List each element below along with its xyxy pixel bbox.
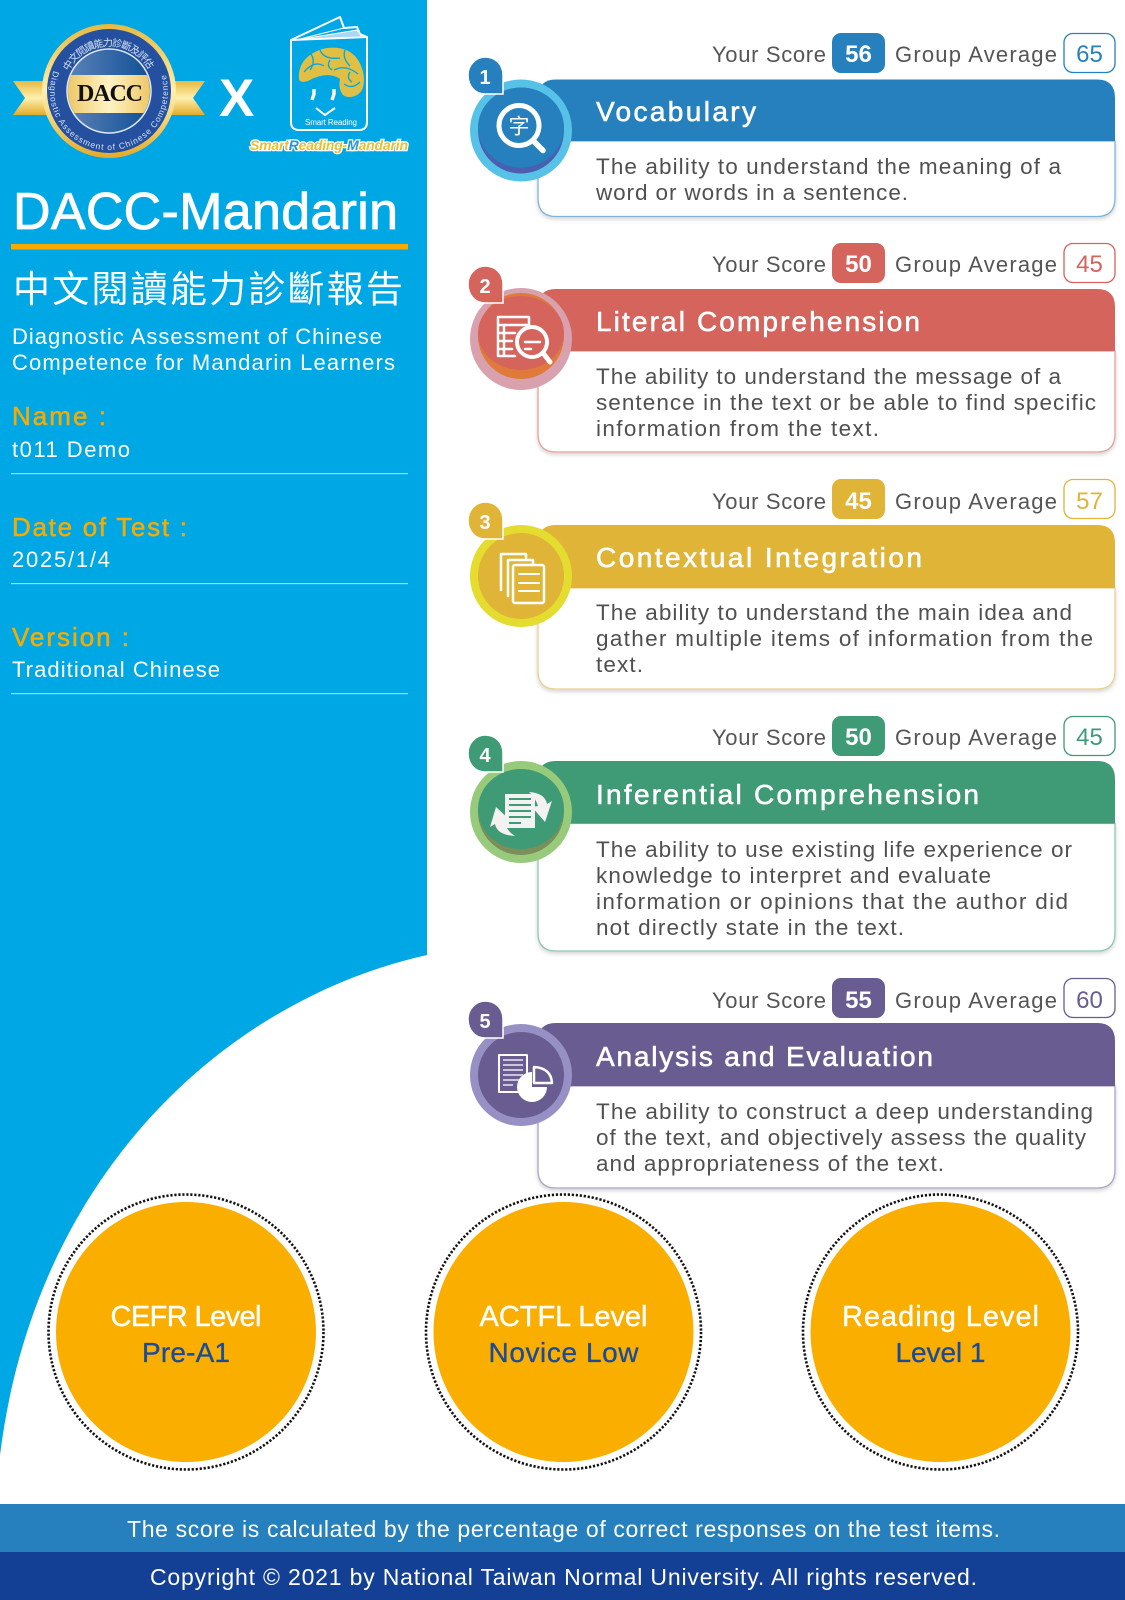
field: version: Traditional Chinese [12, 657, 220, 682]
description: not directly state in the text. [596, 915, 904, 940]
X symbol: X [219, 69, 254, 128]
description: and appropriateness of the text. [596, 1151, 944, 1176]
scores: Group Average [895, 252, 1057, 277]
description: knowledge to interpret and evaluate [596, 863, 991, 888]
heading: Vocabulary [596, 96, 756, 127]
scores: 50 [845, 724, 872, 751]
panel: vocabulary [468, 33, 1115, 216]
icon: document with pie chart [470, 1024, 572, 1126]
field: version [11, 622, 408, 694]
field: date of test [11, 512, 408, 584]
seal ring text: 中文閱讀能力診斷及評估 [63, 38, 154, 70]
title: DACC-Mandarin [13, 183, 398, 241]
description [596, 600, 1093, 677]
level circle: reading: Reading Level [842, 1301, 1039, 1333]
scores: 60 [1076, 987, 1103, 1014]
description: word or words in a sentence. [595, 180, 908, 205]
card body [538, 588, 1115, 689]
title underline [11, 244, 408, 250]
badge: 3: 3 [479, 512, 491, 534]
badge: 1 [468, 57, 503, 94]
field: version: Version : [12, 622, 129, 652]
description: The ability to construct a deep understanding [596, 1099, 1093, 1124]
scores [712, 33, 1115, 73]
subtitle: Competence for Mandarin Learners [12, 350, 395, 375]
heading: Analysis and Evaluation [596, 1041, 933, 1072]
card header [538, 761, 1115, 824]
icon: document with arrows [470, 761, 572, 863]
scores: Group Average [895, 988, 1057, 1013]
description: The ability to understand the meaning of a [596, 154, 1061, 179]
badge: 2: 2 [479, 276, 491, 298]
scores: 65 [1076, 41, 1103, 68]
badge: 2 [468, 266, 503, 303]
level circle: ACTFL [426, 1194, 701, 1470]
scores: Group Average [895, 42, 1057, 67]
icon: smile face [312, 89, 334, 100]
card body [538, 1086, 1115, 1188]
icon: document with magnifier [470, 288, 572, 390]
seal ring text [48, 38, 168, 150]
card header [538, 1023, 1115, 1086]
badge: 4 [468, 735, 503, 772]
icon: magnifier with character: 字 [508, 116, 530, 138]
scores: Your Score [712, 42, 826, 67]
Chinese title: 中文閱讀能力診斷報告 [13, 259, 403, 313]
field: name: Name : [12, 401, 106, 431]
card body [538, 824, 1115, 951]
scores: 55 [845, 987, 872, 1014]
level circle: CEFR: CEFR Level [110, 1301, 262, 1333]
level circle: reading: Level 1 [896, 1337, 986, 1368]
logo wordmark: SmartReading-Mandarin [250, 137, 408, 153]
icon: book pages [291, 17, 367, 40]
panel: blue sidebar with curve [0, 0, 427, 1455]
description: The ability to understand the message of a [596, 364, 1061, 389]
icon: magnifier with character [470, 80, 572, 182]
scores: 45 [845, 488, 872, 515]
icon: gold ribbon [13, 81, 205, 115]
heading: Literal Comprehension [596, 306, 920, 337]
description: information from the text. [596, 416, 879, 441]
panel: literal comprehension [468, 243, 1115, 452]
icon: stacked documents [470, 525, 572, 627]
heading: Inferential Comprehension [596, 779, 979, 810]
scores: Group Average [895, 489, 1057, 514]
logo caption: Smart Reading [305, 118, 357, 127]
scores: 50 [845, 251, 872, 278]
scores [712, 243, 1115, 283]
field: name: t011 Demo [12, 437, 130, 462]
level circle: CEFR: Pre-A1 [142, 1337, 230, 1368]
scores: Your Score [712, 725, 826, 750]
scores: 57 [1076, 488, 1103, 515]
footer: score note: The score is calculated by the percentage of correct responses on the test items. [127, 1516, 1000, 1542]
scores: 56 [845, 41, 872, 68]
description: sentence in the text or be able to find specific [596, 390, 1096, 415]
scores: Your Score [712, 988, 826, 1013]
panel: inferential comprehension [468, 716, 1115, 951]
scores: Your Score [712, 252, 826, 277]
scores [712, 716, 1115, 756]
description: gather multiple items of information from the [596, 626, 1093, 651]
level circle: ACTFL: Novice Low [488, 1337, 639, 1368]
field: name [11, 401, 408, 474]
scores: Your Score [712, 489, 826, 514]
panel: analysis and evaluation [468, 978, 1115, 1188]
card header [538, 289, 1115, 351]
description [596, 1099, 1093, 1176]
card header [538, 80, 1115, 141]
description [595, 154, 1061, 205]
card body [538, 351, 1115, 452]
scores [712, 978, 1115, 1018]
badge: 5 [468, 1001, 503, 1038]
description: The ability to understand the main idea and [596, 600, 1072, 625]
level circle: ACTFL: ACTFL Level [480, 1301, 648, 1333]
subtitle [12, 324, 395, 375]
panel: contextual integration [468, 479, 1115, 689]
footer: score note [0, 1504, 1125, 1552]
card body [538, 141, 1115, 216]
field: date of test: Date of Test : [12, 512, 187, 542]
logo: DACC seal [13, 24, 205, 158]
badge: 3 [468, 502, 503, 539]
level circle: CEFR [48, 1194, 324, 1470]
description: The ability to use existing life experience or [596, 837, 1072, 862]
description: of the text, and objectively assess the quality [596, 1125, 1087, 1150]
scores: Group Average [895, 725, 1057, 750]
seal title: DACC [77, 81, 143, 107]
card header [538, 525, 1115, 588]
description [596, 837, 1072, 940]
seal ring text: Diagnostic Assessment of Chinese Competence [48, 71, 168, 150]
badge: 4: 4 [479, 745, 491, 767]
footer: copyright [0, 1552, 1125, 1600]
description [596, 364, 1096, 441]
scores [712, 479, 1115, 519]
footer: copyright: Copyright © 2021 by National Taiwan Normal University. All rights reserved. [150, 1564, 977, 1590]
badge: 5: 5 [479, 1011, 491, 1033]
level circle: reading [803, 1194, 1078, 1470]
field: date of test: 2025/1/4 [12, 547, 110, 572]
badge: 1: 1 [479, 67, 491, 89]
scores: 45 [1076, 724, 1103, 751]
subtitle: Diagnostic Assessment of Chinese [12, 324, 382, 349]
icon: book outline [291, 37, 367, 130]
logo: Smart Reading book [291, 17, 367, 130]
icon: brain [299, 48, 364, 97]
heading: Contextual Integration [596, 542, 922, 573]
description: information or opinions that the author did [596, 889, 1068, 914]
scores: 45 [1076, 251, 1103, 278]
description: text. [596, 652, 643, 677]
